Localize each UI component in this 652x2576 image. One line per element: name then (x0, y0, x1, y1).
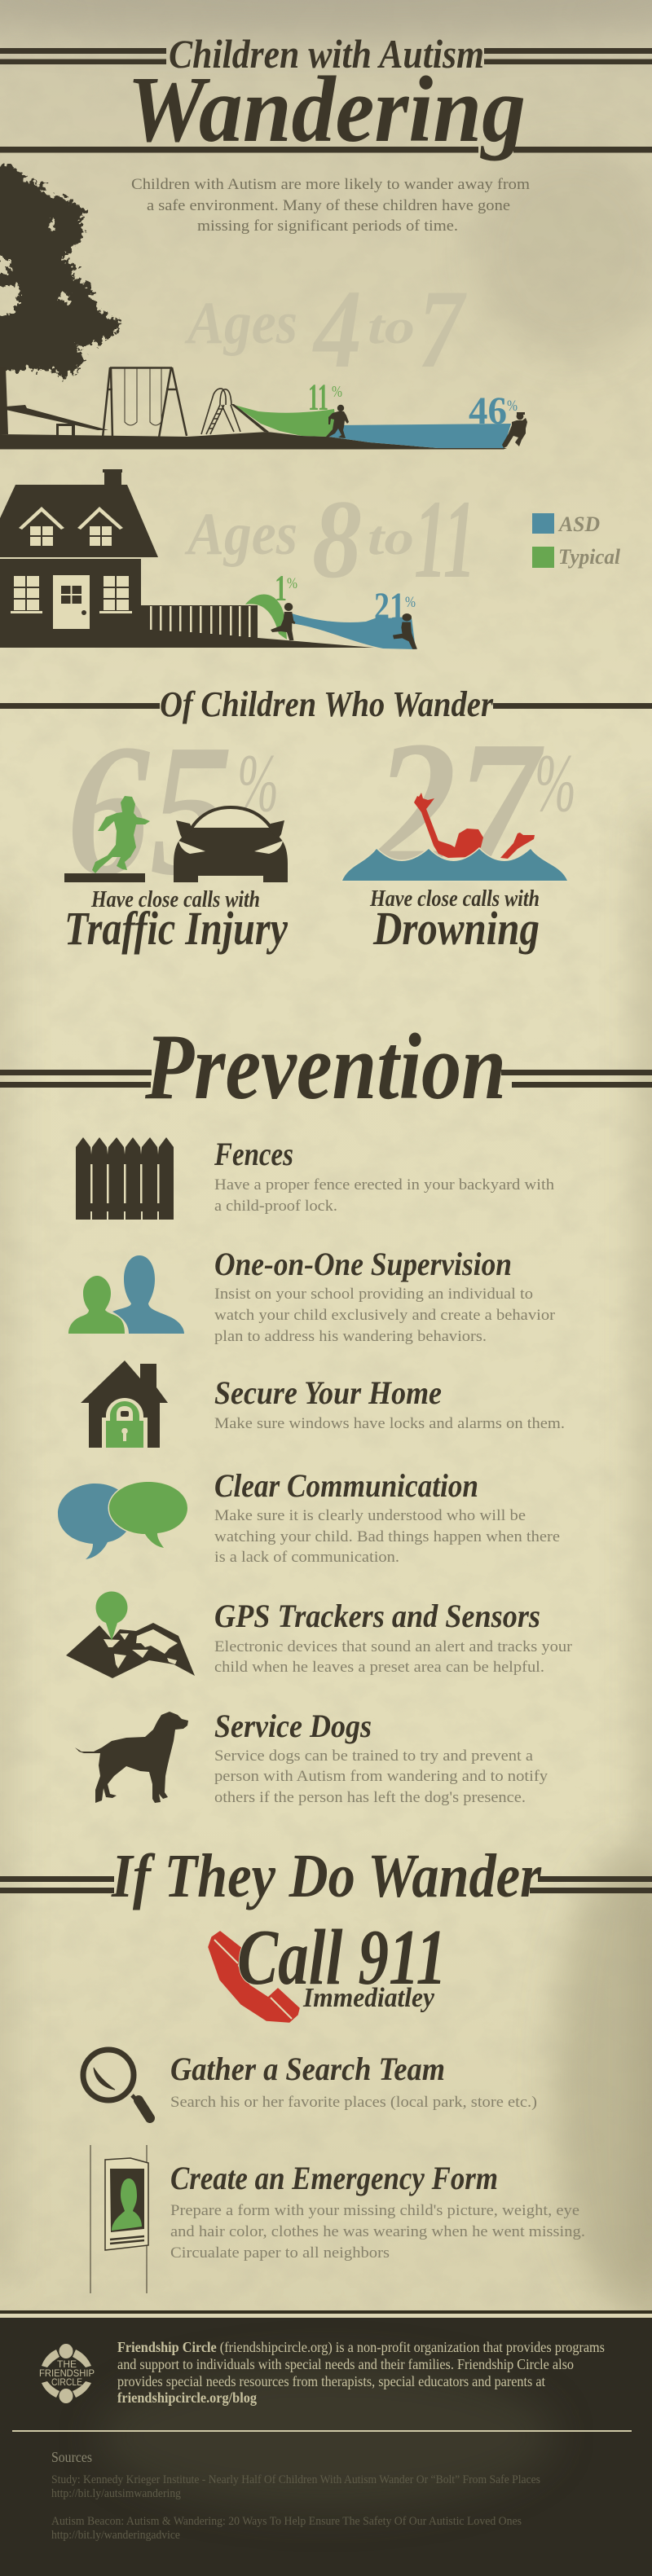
label: 1%: 1 (275, 567, 287, 609)
legend (532, 512, 621, 569)
title stripes (0, 48, 652, 153)
icon: house with lock (81, 1361, 168, 1448)
logo: The Friendship Circle (39, 2344, 95, 2403)
callout: Call 911 (209, 1914, 447, 2022)
body text (214, 1638, 573, 1676)
body text: a child-proof lock. (214, 1198, 337, 1215)
panel: footer (0, 2310, 652, 2576)
heading: Ages 8 to 11 (184, 477, 476, 601)
icon: car (174, 807, 288, 882)
icon: phone (209, 1932, 299, 2022)
bar: green typical 8-11 (245, 595, 287, 640)
icon: running child green (271, 603, 295, 640)
label: 11%: 11 (308, 376, 328, 419)
icon: seesaw (6, 405, 108, 436)
body text: Circualate paper to all neighbors (170, 2244, 390, 2262)
item: Service Dogs (75, 1708, 548, 1806)
ground strip (64, 873, 145, 882)
heading: GPS Trackers and Sensors (214, 1598, 540, 1634)
item: One-on-One Supervision (68, 1246, 556, 1345)
label: 1%: % (287, 575, 297, 592)
body text: Have a proper fence erected in your backyard with (214, 1176, 555, 1193)
body text (214, 1747, 548, 1806)
body text (214, 1507, 560, 1566)
heading: Secure Your Home (214, 1374, 442, 1411)
sources: Autism Beacon: Autism & Wandering: 20 Ways To Help Ensure The Safety Of Our Autistic Loved Ones (51, 2515, 522, 2528)
item: Gather a Search Team (83, 2050, 537, 2118)
icon: running child green (326, 405, 349, 438)
heading: Ages 8 to 11: 8 (312, 477, 362, 601)
caption: Have close calls with: Have close calls with (90, 886, 260, 912)
text: Immediatley: Immediatley (302, 1983, 435, 2013)
body text: person with Autism from wandering and to notify (214, 1768, 548, 1785)
icon: missing poster (90, 2145, 148, 2293)
body text: plan to address his wandering behaviors. (214, 1328, 487, 1345)
bar: green typical 4-7 (234, 405, 336, 437)
stat: 27% drowning (342, 702, 576, 955)
icon: house (0, 469, 158, 648)
heading: Clear Communication (214, 1467, 478, 1504)
bar: blue ASD 8-11 (289, 613, 416, 649)
body text: Make sure it is clearly understood who will be (214, 1507, 526, 1524)
item: Secure Your Home (81, 1361, 565, 1448)
about text: provides special needs resources from therapists, special educators and parents at (117, 2373, 545, 2389)
chart: ages 8 to 11 (245, 567, 417, 649)
about text (117, 2339, 605, 2406)
number: 65%: 65 (67, 706, 233, 915)
label: 21%: 21 (374, 585, 405, 628)
caption: Have close calls with: Have close calls with (369, 886, 540, 912)
icon: fence (76, 1137, 174, 1220)
heading: Ages 8 to 11: Ages (184, 501, 297, 568)
intro paragraph (131, 176, 530, 235)
body text: and hair color, clothes he was wearing when he went missing. (170, 2223, 585, 2240)
heading: Ages 4 to 7: Ages (184, 290, 297, 357)
heading: Fences (214, 1136, 293, 1172)
sources: Study: Kennedy Krieger Institute - Nearly Half Of Children With Autism Wander Or “Bolt” From Safe Places (51, 2473, 540, 2486)
about text: friendshipcircle.org/blog (117, 2389, 257, 2406)
body text: is a lack of communication. (214, 1549, 399, 1566)
icon: two people (68, 1255, 184, 1334)
label: 46%: 46 (469, 389, 507, 433)
logo: The Friendship Circle: FRIENDSHIP (39, 2367, 95, 2379)
heading: Of Children Who Wander: Of Children Who Wander (160, 684, 494, 724)
icon: yard fence (141, 605, 374, 648)
heading: Gather a Search Team (170, 2051, 445, 2087)
icon: running child blue (502, 412, 527, 448)
body text (214, 1176, 555, 1215)
item: Fences (76, 1136, 555, 1220)
logo: The Friendship Circle: CIRCLE (51, 2376, 82, 2388)
text: Call 911: Call 911 (237, 1914, 447, 2002)
icon: map with pin (66, 1592, 195, 1678)
heading: Service Dogs (214, 1708, 372, 1744)
sources: Sources (51, 2449, 92, 2465)
legend: ASD: ASD (557, 512, 600, 536)
slide chute (231, 404, 269, 432)
sources: http://bit.ly/autsimwandering (51, 2487, 181, 2500)
body text: child when he leaves a preset area can be helpful. (214, 1659, 544, 1676)
item: GPS Trackers and Sensors (66, 1592, 573, 1678)
about text: and support to individuals with special needs and their families. Friendship Circle also (117, 2356, 574, 2372)
legend: Typical: Typical (558, 545, 621, 569)
title: Children with Autism: Children with Autism (169, 31, 484, 77)
body text: watching your child. Bad things happen when there (214, 1528, 560, 1545)
heading: Ages 4 to 7 (184, 266, 467, 391)
heading: One-on-One Supervision (214, 1246, 512, 1282)
icon: running child blue (393, 613, 417, 649)
heading: Ages 4 to 7: to (368, 300, 415, 354)
icon: swing set (103, 367, 187, 438)
stripes: prevention (0, 1070, 652, 1088)
body text: Make sure windows have locks and alarms on them. (214, 1415, 565, 1432)
ground (0, 432, 507, 450)
icon: drowning figure (414, 793, 535, 859)
body text: Search his or her favorite places (local park, store etc.) (170, 2094, 537, 2111)
icon: speech bubbles (58, 1482, 187, 1559)
stat: 65% traffic injury (64, 706, 288, 955)
about text: Friendship Circle (friendshipcircle.org) is a non-profit organization that provides programs (117, 2339, 605, 2356)
body text: Insist on your school providing an individual to (214, 1286, 533, 1303)
icon: magnifying glass (83, 2050, 150, 2118)
stripes: if they do wander (0, 1876, 652, 1893)
heading: If They Do Wander: If They Do Wander (111, 1842, 542, 1910)
number: 27%: % (535, 737, 576, 829)
heading: Prevention: Prevention (144, 1015, 506, 1119)
icon: running child green (92, 796, 150, 873)
heading: Ages 8 to 11: to (368, 511, 414, 565)
heading: Ages 8 to 11: 11 (414, 477, 476, 601)
heading: Create an Emergency Form (170, 2160, 498, 2196)
sources (51, 2449, 540, 2542)
body text: Prepare a form with your missing child's picture, weight, eye (170, 2202, 579, 2219)
item: Clear Communication (58, 1467, 560, 1566)
body text: others if the person has left the dog's presence. (214, 1789, 526, 1806)
bar: blue ASD 4-7 (328, 424, 511, 448)
heading: Ages 4 to 7: 4 (311, 266, 362, 391)
body text: watch your child exclusively and create a behavior (214, 1307, 556, 1324)
caption: Traffic Injury: Traffic Injury (64, 902, 288, 955)
logo: The Friendship Circle: THE (57, 2358, 77, 2370)
body text (214, 1286, 556, 1345)
item: Create an Emergency Form (90, 2145, 585, 2293)
caption: Drowning: Drowning (372, 902, 540, 955)
intro paragraph: missing for significant periods of time. (197, 218, 458, 235)
icon: water waves (342, 849, 567, 881)
icon: tree (0, 165, 121, 434)
intro paragraph: Children with Autism are more likely to wander away from (131, 176, 530, 193)
number: 65%: % (237, 737, 279, 829)
heading: Ages 4 to 7: 7 (418, 266, 467, 391)
intro paragraph: a safe environment. Many of these children have gone (147, 197, 510, 214)
body text: Service dogs can be trained to try and prevent a (214, 1747, 534, 1765)
title: Wandering: Wandering (127, 58, 526, 162)
icon: slide (201, 389, 240, 434)
stripes: of children who wander (0, 703, 652, 709)
label: 11%: % (332, 383, 342, 401)
body text (170, 2202, 585, 2262)
playground ground and equipment (0, 367, 527, 450)
sources: http://bit.ly/wanderingadvice (51, 2529, 180, 2542)
label: 21%: % (405, 594, 416, 611)
label: 46%: % (507, 398, 518, 415)
body text: Electronic devices that sound an alert and tracks your (214, 1638, 573, 1655)
icon: dog (75, 1712, 188, 1803)
number: 27%: 27 (372, 702, 544, 912)
